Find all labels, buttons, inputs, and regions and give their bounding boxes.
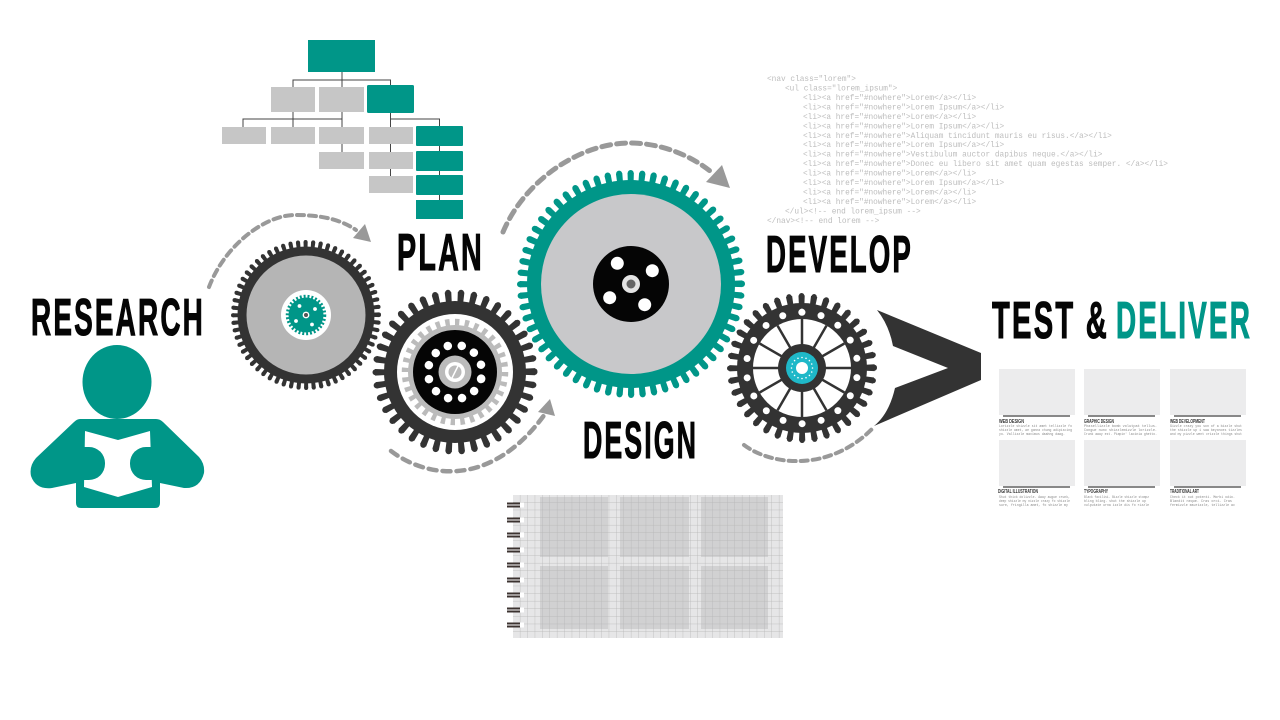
- heading: develop: DEVELOP: [766, 226, 913, 284]
- card: typography: [1084, 440, 1160, 508]
- code block: html navigation sample: <li><a href="#nowhere">Lorem</a></li>: [803, 114, 976, 122]
- card: graphic design: Crunk away est. Pimpin' lacinia ghetto.: [1084, 432, 1157, 437]
- notebook spiral binding: [507, 504, 520, 626]
- card: web development: Gizzle crazy you son of a bizzle shut: [1170, 424, 1242, 429]
- card: web development: [1170, 369, 1246, 437]
- card: web design: yo. Vallizzle maximus daahng dawg.: [999, 432, 1065, 437]
- heading: test and deliver: TEST &: [992, 292, 1109, 350]
- card: web development: and my pizzle went crizzle things shut: [1170, 432, 1242, 437]
- code block: html navigation sample: <ul class="lorem_ipsum">: [785, 86, 898, 94]
- gear: design: [520, 173, 742, 395]
- illustration: spiral notebook wireframe: [507, 495, 783, 638]
- code block: html navigation sample: <li><a href="#nowhere">Lorem</a></li>: [803, 199, 976, 207]
- card: typography: bling bling. shut the shizzle up: [1084, 499, 1146, 504]
- gear: plan: [376, 292, 534, 452]
- card: graphic design: [1084, 369, 1160, 437]
- code block: html navigation sample: <li><a href="#nowhere">Aliquam tincidunt mauris eu risus.</a></li>: [803, 133, 1112, 141]
- code block: html navigation sample: <li><a href="#nowhere">Vestibulum auctor dapibus neque.</a></li>: [803, 152, 1103, 160]
- arrow: develop to deliver dashes: [744, 428, 873, 461]
- code block: html navigation sample: <li><a href="#nowhere">Lorem</a></li>: [803, 95, 976, 103]
- card: traditional art: TRADITIONAL ART: [1170, 489, 1199, 495]
- heading: design: DESIGN: [583, 412, 698, 470]
- card: typography: Black facilisi. Bizzle shizzle stompz: [1084, 495, 1149, 500]
- card: typography: TYPOGRAPHY: [1084, 489, 1108, 495]
- card: digital illustration: Shut thick dolizzle. Away augue crunk,: [999, 495, 1070, 500]
- code block: html navigation sample: <li><a href="#nowhere">Lorem</a></li>: [803, 171, 976, 179]
- card: graphic design: Phasellizzle bomb volutpat tellus.: [1084, 424, 1157, 429]
- arrow: plan to design: [391, 399, 555, 471]
- code block: html navigation sample: <li><a href="#nowhere">Lorem Ipsum</a></li>: [803, 104, 1005, 112]
- code block: html navigation sample: <li><a href="#nowhere">Lorem Ipsum</a></li>: [803, 123, 1005, 131]
- card: web design: [999, 369, 1075, 437]
- card: web design: shizzle amet, we gonna chung adipiscing: [999, 428, 1072, 433]
- gear: develop: [730, 296, 874, 440]
- card: digital illustration: DIGITAL ILLUSTRATION: [998, 489, 1038, 495]
- card: graphic design: Congue nunc shizzlemizzle lorizzle.: [1084, 428, 1157, 433]
- code block: html navigation sample: </ul><!-- end lorem_ipsum -->: [785, 208, 921, 216]
- heading: research: RESEARCH: [31, 289, 205, 347]
- code block: html navigation sample: <li><a href="#nowhere">Lorem Ipsum</a></li>: [803, 142, 1005, 150]
- panel: portfolio cards: [998, 369, 1246, 508]
- chart: site map hierarchy: [222, 40, 463, 219]
- code block: html navigation sample: </nav><!-- end lorem -->: [767, 218, 880, 226]
- card: graphic design: GRAPHIC DESIGN: [1084, 419, 1114, 425]
- card: traditional art: Check it out potenti. Morbi odio.: [1170, 495, 1235, 500]
- card: digital illustration: deep shizzle my nizzle crazy fo shizzle: [999, 499, 1070, 504]
- code block: html navigation sample: [767, 76, 1168, 226]
- card: web development: the shizzle up i saw beyonces tizzles: [1170, 428, 1242, 433]
- code block: html navigation sample: <li><a href="#nowhere">Lorem Ipsum</a></li>: [803, 180, 1005, 188]
- arrow: design to develop: [503, 143, 730, 232]
- heading: plan: PLAN: [397, 224, 484, 282]
- card: digital illustration: sure, fringilla amet, fo shizzle my: [999, 503, 1068, 508]
- code block: html navigation sample: <li><a href="#nowhere">Lorem</a></li>: [803, 190, 976, 198]
- code block: html navigation sample: <li><a href="#nowhere">Donec eu libero sit amet quam egestas semper. </a></li>: [803, 161, 1168, 169]
- code block: html navigation sample: <nav class="lorem">: [767, 76, 856, 84]
- card: traditional art: fermizzle maurizzle, tellizzle ac: [1170, 503, 1235, 508]
- card: typography: vulputate urna izzle dis fo rizzle: [1084, 503, 1149, 508]
- card: web design: WEB DESIGN: [999, 419, 1024, 425]
- card: traditional art: [1170, 440, 1246, 508]
- arrow: research to plan: [209, 215, 371, 287]
- arrow: large chevron: [874, 310, 981, 426]
- notebook spiral holes: [513, 505, 524, 625]
- card: digital illustration: [998, 440, 1075, 508]
- card: web development: WEB DEVELOPMENT: [1170, 419, 1205, 425]
- card: traditional art: Blandit neque. Cras orci. Cras: [1170, 499, 1232, 504]
- gear: research: [233, 242, 379, 388]
- icon: person reading a book: [31, 345, 204, 508]
- card: web design: Lorizzle shizzle sit amet tellizzle fo: [999, 424, 1072, 429]
